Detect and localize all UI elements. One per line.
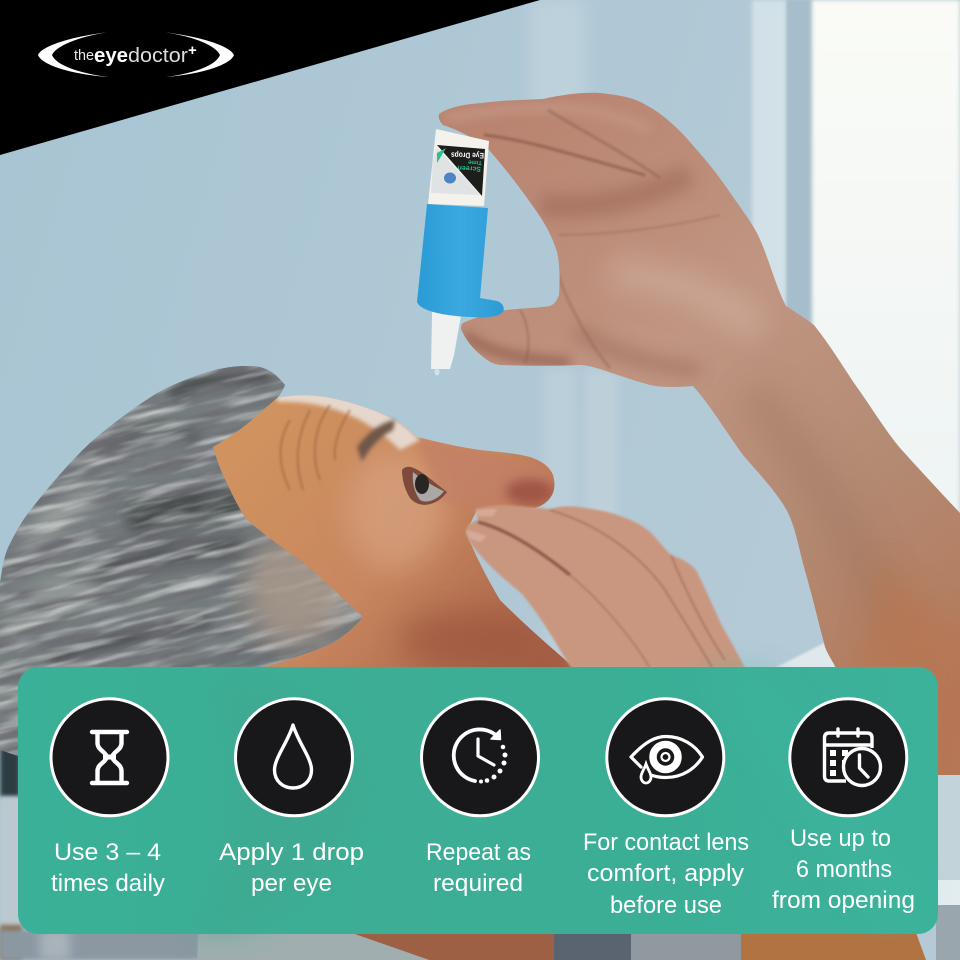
icon: repeat clock: [422, 699, 538, 816]
logo: the eye doctor: the: [74, 47, 94, 64]
panel: usage instructions: [18, 667, 938, 934]
logo: the eye doctor: eye: [94, 45, 128, 67]
step 5: use up to 6 months: [772, 699, 915, 914]
label: contact lens comfort: before use: [610, 892, 722, 919]
photo: eye drop bottle: Screen: [457, 164, 481, 172]
step 4: contact lens comfort: [583, 699, 749, 919]
icon: water drop: [236, 699, 352, 816]
photo: fingers on the cheek: [466, 505, 745, 668]
label: use 3-4 times daily: Use 3 – 4: [54, 839, 161, 866]
photo: eye drop bottle: [417, 129, 504, 376]
label: apply 1 drop per eye: Apply 1 drop: [219, 839, 364, 866]
bottle label: [428, 129, 489, 206]
step 1: use 3-4 times daily: [51, 699, 168, 897]
label: contact lens comfort: [583, 829, 749, 919]
label: use 3-4 times daily: [51, 839, 165, 897]
label: repeat as required: Repeat as: [426, 839, 531, 866]
bottle blue cap: [417, 204, 504, 317]
label: repeat as required: required: [433, 870, 523, 897]
label: use up to 6 months from opening: Use up to: [790, 825, 891, 852]
icon: eye with tear: [607, 699, 724, 816]
photo: eye drop bottle: Time: [467, 158, 482, 165]
bottle nozzle: [431, 312, 461, 369]
photo: eye and brow: [357, 420, 447, 505]
label: repeat as required: [426, 839, 531, 897]
photo: head and face: [213, 395, 574, 667]
label: use up to 6 months from opening: from opening: [772, 887, 915, 914]
photo: raised arm and hand holding the bottle: [430, 85, 960, 795]
photo: clothing and arm below the panel: [0, 930, 926, 960]
step 2: apply 1 drop per eye: [219, 699, 364, 897]
label: use up to 6 months from opening: [772, 825, 915, 914]
step 3: repeat as required: [422, 699, 538, 897]
photo: eye drop bottle: Eye Drops: [450, 150, 484, 160]
logo: the eye doctor: +: [188, 42, 197, 59]
label: apply 1 drop per eye: [219, 839, 364, 897]
logo: the eye doctor: [38, 32, 234, 77]
photo: grey hair: [0, 366, 363, 756]
label: use up to 6 months from opening: 6 months: [796, 856, 892, 883]
logo: the eye doctor: doctor: [128, 45, 188, 67]
icon: hourglass: [51, 699, 168, 816]
label: contact lens comfort: For contact lens: [583, 829, 749, 856]
brand corner banner: [0, 0, 540, 155]
label: use 3-4 times daily: times daily: [51, 870, 165, 897]
icon: calendar with clock: [790, 699, 907, 816]
label: contact lens comfort: comfort, apply: [587, 860, 744, 887]
label: apply 1 drop per eye: per eye: [251, 870, 332, 897]
